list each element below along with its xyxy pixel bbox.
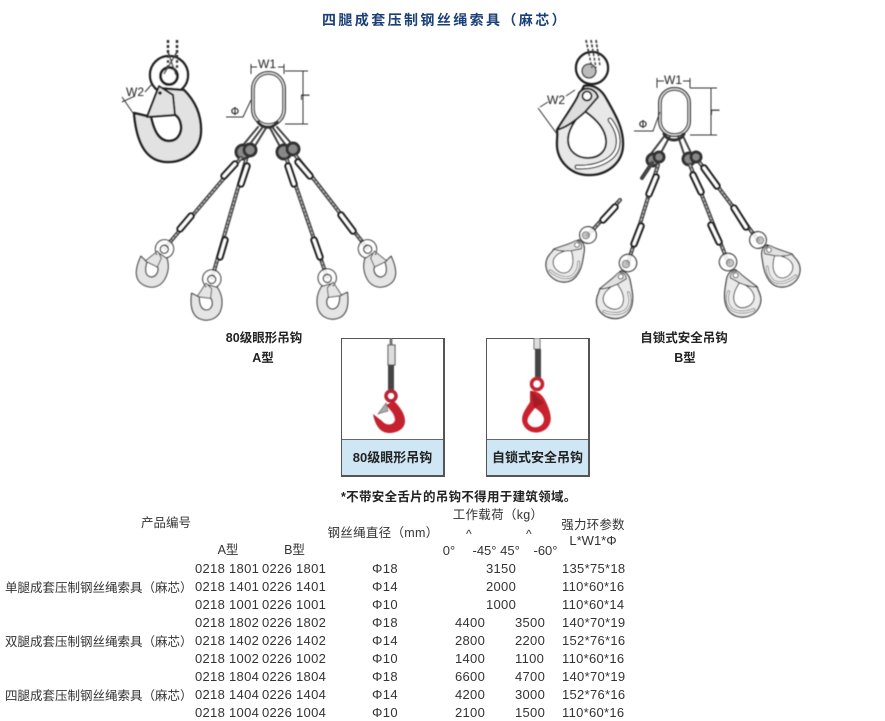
table: product specifications: [5, 508, 625, 720]
row 1: [195, 561, 625, 576]
master ring A: [253, 73, 284, 125]
row 4: [195, 615, 625, 630]
row 7: Φ18: [372, 669, 398, 684]
title: 四腿成套压制钢丝绳索具（麻芯）: [322, 12, 568, 28]
row 4: 0226 1802: [262, 615, 326, 630]
W1 L phi dimensions B: [634, 73, 722, 135]
header: type B: B型: [284, 543, 305, 557]
note: *不带安全舌片的吊钩不得用于建筑领域。: [341, 490, 577, 504]
row 4: 3500: [515, 615, 545, 630]
row 2: 2000: [486, 579, 516, 594]
header: ring parameters: 强力环参数: [561, 518, 625, 532]
panel: hook A photo: [341, 338, 445, 477]
W2 dimension A: [122, 84, 152, 113]
row 8: 0218 1404: [195, 687, 259, 702]
row 3: [195, 597, 624, 612]
header: angle carets: ^: [526, 527, 532, 541]
row 5: 2800: [455, 633, 485, 648]
panel label: 自锁式安全吊钩: [492, 450, 583, 465]
header: angle carets: ^: [466, 527, 472, 541]
row 4: 140*70*19: [562, 615, 625, 630]
row label 1: 单腿成套压制钢丝绳索具（麻芯）: [5, 581, 193, 595]
icon: large hook A: [134, 40, 201, 162]
row 9: 0226 1004: [262, 705, 326, 720]
header: angles: 0°: [443, 543, 455, 558]
row 4: Φ18: [372, 615, 398, 630]
technical drawings: [121, 39, 802, 322]
row 4: 0218 1802: [195, 615, 259, 630]
header: type A: A型: [218, 543, 238, 557]
row 6: 110*60*16: [562, 651, 624, 666]
row 3: Φ10: [372, 597, 398, 612]
row 7: 4700: [515, 669, 545, 684]
W1 L phi dimensions A: Φ: [231, 105, 240, 118]
row 8: Φ14: [372, 687, 398, 702]
master ring B: [660, 89, 689, 135]
row 7: 140*70*19: [562, 669, 625, 684]
row 7: 0218 1804: [195, 669, 259, 684]
row label 2: 双腿成套压制钢丝绳索具（麻芯）: [5, 635, 193, 649]
W1 L phi dimensions B: L: [708, 109, 722, 116]
row 2: Φ14: [372, 579, 398, 594]
icon: red eye hook: [372, 338, 406, 434]
row 9: 0218 1004: [195, 705, 259, 720]
row 6: 0226 1002: [262, 651, 326, 666]
row 1: 0218 1801: [195, 561, 259, 576]
row 6: [195, 651, 624, 666]
W1 L phi dimensions A: W1: [258, 57, 276, 71]
W1 L phi dimensions A: L: [298, 94, 312, 101]
caption: type B label: B型: [674, 351, 696, 365]
row 2: 0226 1401: [262, 579, 326, 594]
header: angles: -60°: [534, 543, 558, 558]
drawing: type A sling: [122, 40, 403, 323]
caption: type B: 自锁式安全吊钩: [640, 331, 728, 345]
W1 L phi dimensions B: Φ: [639, 118, 648, 131]
row 3: 0218 1001: [195, 597, 259, 612]
W1 L phi dimensions B: W1: [664, 73, 682, 87]
row 5: [195, 633, 625, 648]
header: angle carets: [466, 527, 532, 541]
row 7: [195, 669, 625, 684]
panel label: [487, 439, 588, 475]
W1 L phi dimensions A: [226, 57, 312, 124]
row 9: 2100: [455, 705, 485, 720]
row 6: 0218 1002: [195, 651, 259, 666]
header: rope diameter: 钢丝绳直径（mm）: [327, 526, 439, 540]
row 2: [195, 579, 624, 594]
row 3: 110*60*14: [562, 597, 624, 612]
row 5: Φ14: [372, 633, 398, 648]
row 1: 3150: [486, 561, 516, 576]
header: working load: 工作载荷（kg）: [453, 508, 543, 522]
header: angles: [443, 543, 558, 558]
small hooks A: [129, 233, 403, 323]
panel label: 80级眼形吊钩: [353, 450, 432, 465]
row 1: Φ18: [372, 561, 398, 576]
row 7: 6600: [455, 669, 485, 684]
row label 3: 四腿成套压制钢丝绳索具（麻芯）: [5, 689, 193, 703]
row 9: [195, 705, 624, 720]
W2 dimension B: W2: [547, 93, 565, 107]
row 1: 0226 1801: [262, 561, 326, 576]
header: angles: -45°: [472, 543, 496, 558]
row 6: 1400: [455, 651, 485, 666]
caption: type A label: A型: [252, 351, 274, 365]
row 6: 1100: [515, 651, 544, 666]
row 5: 152*76*16: [562, 633, 625, 648]
row 7: 0226 1804: [262, 669, 326, 684]
row 8: 3000: [515, 687, 545, 702]
W2 dimension B: [538, 90, 575, 134]
header: angles: 45°: [500, 543, 520, 558]
rigging legs A: [165, 122, 367, 278]
row 2: 110*60*16: [562, 579, 624, 594]
row 9: Φ10: [372, 705, 398, 720]
small hooks B: [539, 217, 807, 323]
header: product code: 产品编号: [141, 516, 191, 530]
row 3: 0226 1001: [262, 597, 326, 612]
icon: large hook B: [557, 40, 623, 175]
rigging legs B: [588, 134, 758, 263]
panel label: [342, 439, 443, 475]
drawing: type B sling: [538, 40, 807, 323]
row 2: 0218 1401: [195, 579, 259, 594]
row 8: [195, 687, 625, 702]
row 5: 0218 1402: [195, 633, 259, 648]
header: ring dimensions: L*W1*Φ: [569, 533, 617, 548]
row 8: 0226 1404: [262, 687, 326, 702]
W2 dimension A: W2: [126, 85, 144, 99]
row 9: 1500: [515, 705, 545, 720]
panel: hook B photo: [486, 338, 590, 477]
row 8: 152*76*16: [562, 687, 625, 702]
row 6: Φ10: [372, 651, 398, 666]
row 4: 4400: [455, 615, 485, 630]
row 9: 110*60*16: [562, 705, 624, 720]
row 3: 1000: [486, 597, 516, 612]
caption: type A: 80级眼形吊钩: [226, 331, 302, 345]
row 1: 135*75*18: [562, 561, 625, 576]
row 5: 0226 1402: [262, 633, 326, 648]
row 8: 4200: [455, 687, 485, 702]
row 5: 2200: [515, 633, 545, 648]
icon: red self-locking hook: [521, 338, 552, 434]
